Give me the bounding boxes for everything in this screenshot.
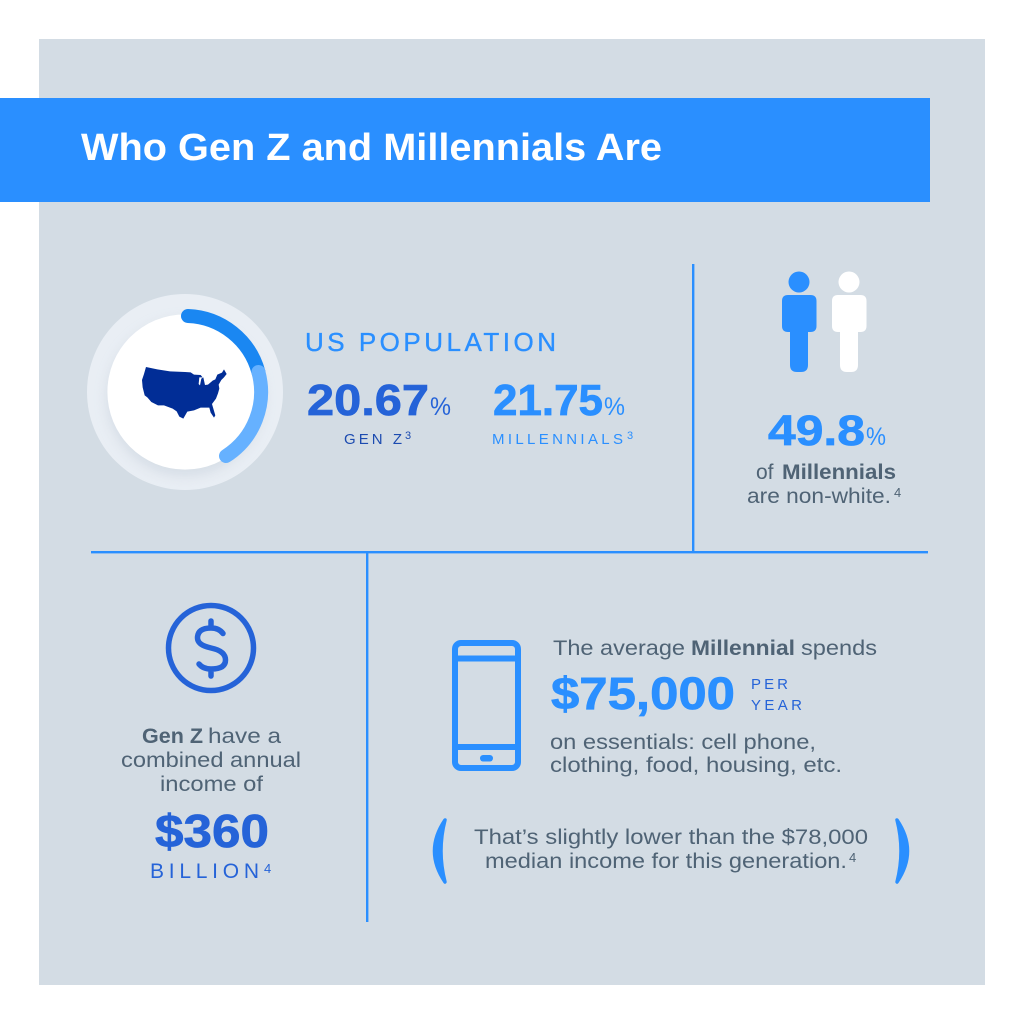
text: Gen Z combined income: income of [160,773,263,796]
icon: phone [455,643,518,768]
panel: Gen Z income [121,606,301,883]
text: median income comparison: That’s slightly lower than the $78,000 [474,826,868,849]
icon: dollar coin [168,606,254,690]
text: of Millennials are non-white: are non-white. [747,485,891,508]
text: on essentials: clothing, food, housing, etc. [550,754,842,777]
text: median income comparison: 4 [849,850,856,865]
stat: $75,000 per year: YEAR [751,697,802,714]
chart: population ring with US map [87,294,283,490]
stat: $75,000 per year: PER [751,676,788,693]
dividers [91,264,928,922]
text: average Millennial spends: The average [553,637,685,660]
panel: US population [87,294,633,490]
text: median income comparison: median income for this generation. [485,850,847,873]
stat: 49.8%: 49.8 [768,407,865,455]
stat: Gen Z share: 20.67 [307,376,429,425]
stat: $360 billion: 4 [264,861,271,876]
stat: Gen Z share: GEN Z [344,431,402,448]
text: average Millennial spends: Millennial [691,637,795,660]
text: Gen Z combined income: have a [208,725,281,748]
text: Gen Z combined income: Gen Z [142,725,203,748]
text: median income comparison [474,826,868,873]
panel: Millennial spending [434,637,908,882]
icon: white person [832,272,866,372]
stat: $75,000 per year [551,668,802,719]
stat: Millennials share: MILLENNIALS [492,431,623,448]
icon: US map [142,367,227,419]
callout: median income [434,820,908,882]
stat: Millennials share: 3 [627,430,633,442]
icon: left bracket [434,820,445,882]
title banner [0,98,930,202]
text: of Millennials are non-white [747,461,901,508]
stat: Millennials share: 21.75 [493,376,603,425]
text: of Millennials are non-white: 4 [894,485,901,500]
text: Gen Z combined income [121,725,301,796]
icon: blue person [782,272,816,372]
stat: $75,000 per year: $75,000 [551,668,735,719]
text: Gen Z combined income: combined annual [121,749,301,772]
stat: 49.8%: % [866,423,886,451]
stat: $360 billion: $360 [155,805,269,857]
stat: Gen Z share: % [430,393,451,421]
text: of Millennials are non-white: Millennials [782,461,896,484]
stat: $360 billion [150,805,271,883]
panel: non-white Millennials [747,272,901,508]
text: on essentials: on essentials: cell phone, [550,731,816,754]
text: of Millennials are non-white: of [756,461,774,484]
stat: Millennials share: % [604,393,625,421]
icon: right bracket [897,820,908,882]
heading: US population: US POPULATION [305,327,556,357]
stat: Gen Z share [307,376,451,448]
stat: Millennials share [492,376,633,448]
stat: $360 billion: BILLION [150,860,259,883]
stat: Gen Z share: 3 [405,430,411,442]
title: Who Gen Z and Millennials Are [81,127,662,169]
text: average Millennial spends [553,637,877,660]
text: average Millennial spends: spends [801,637,877,660]
text: on essentials [550,731,842,777]
